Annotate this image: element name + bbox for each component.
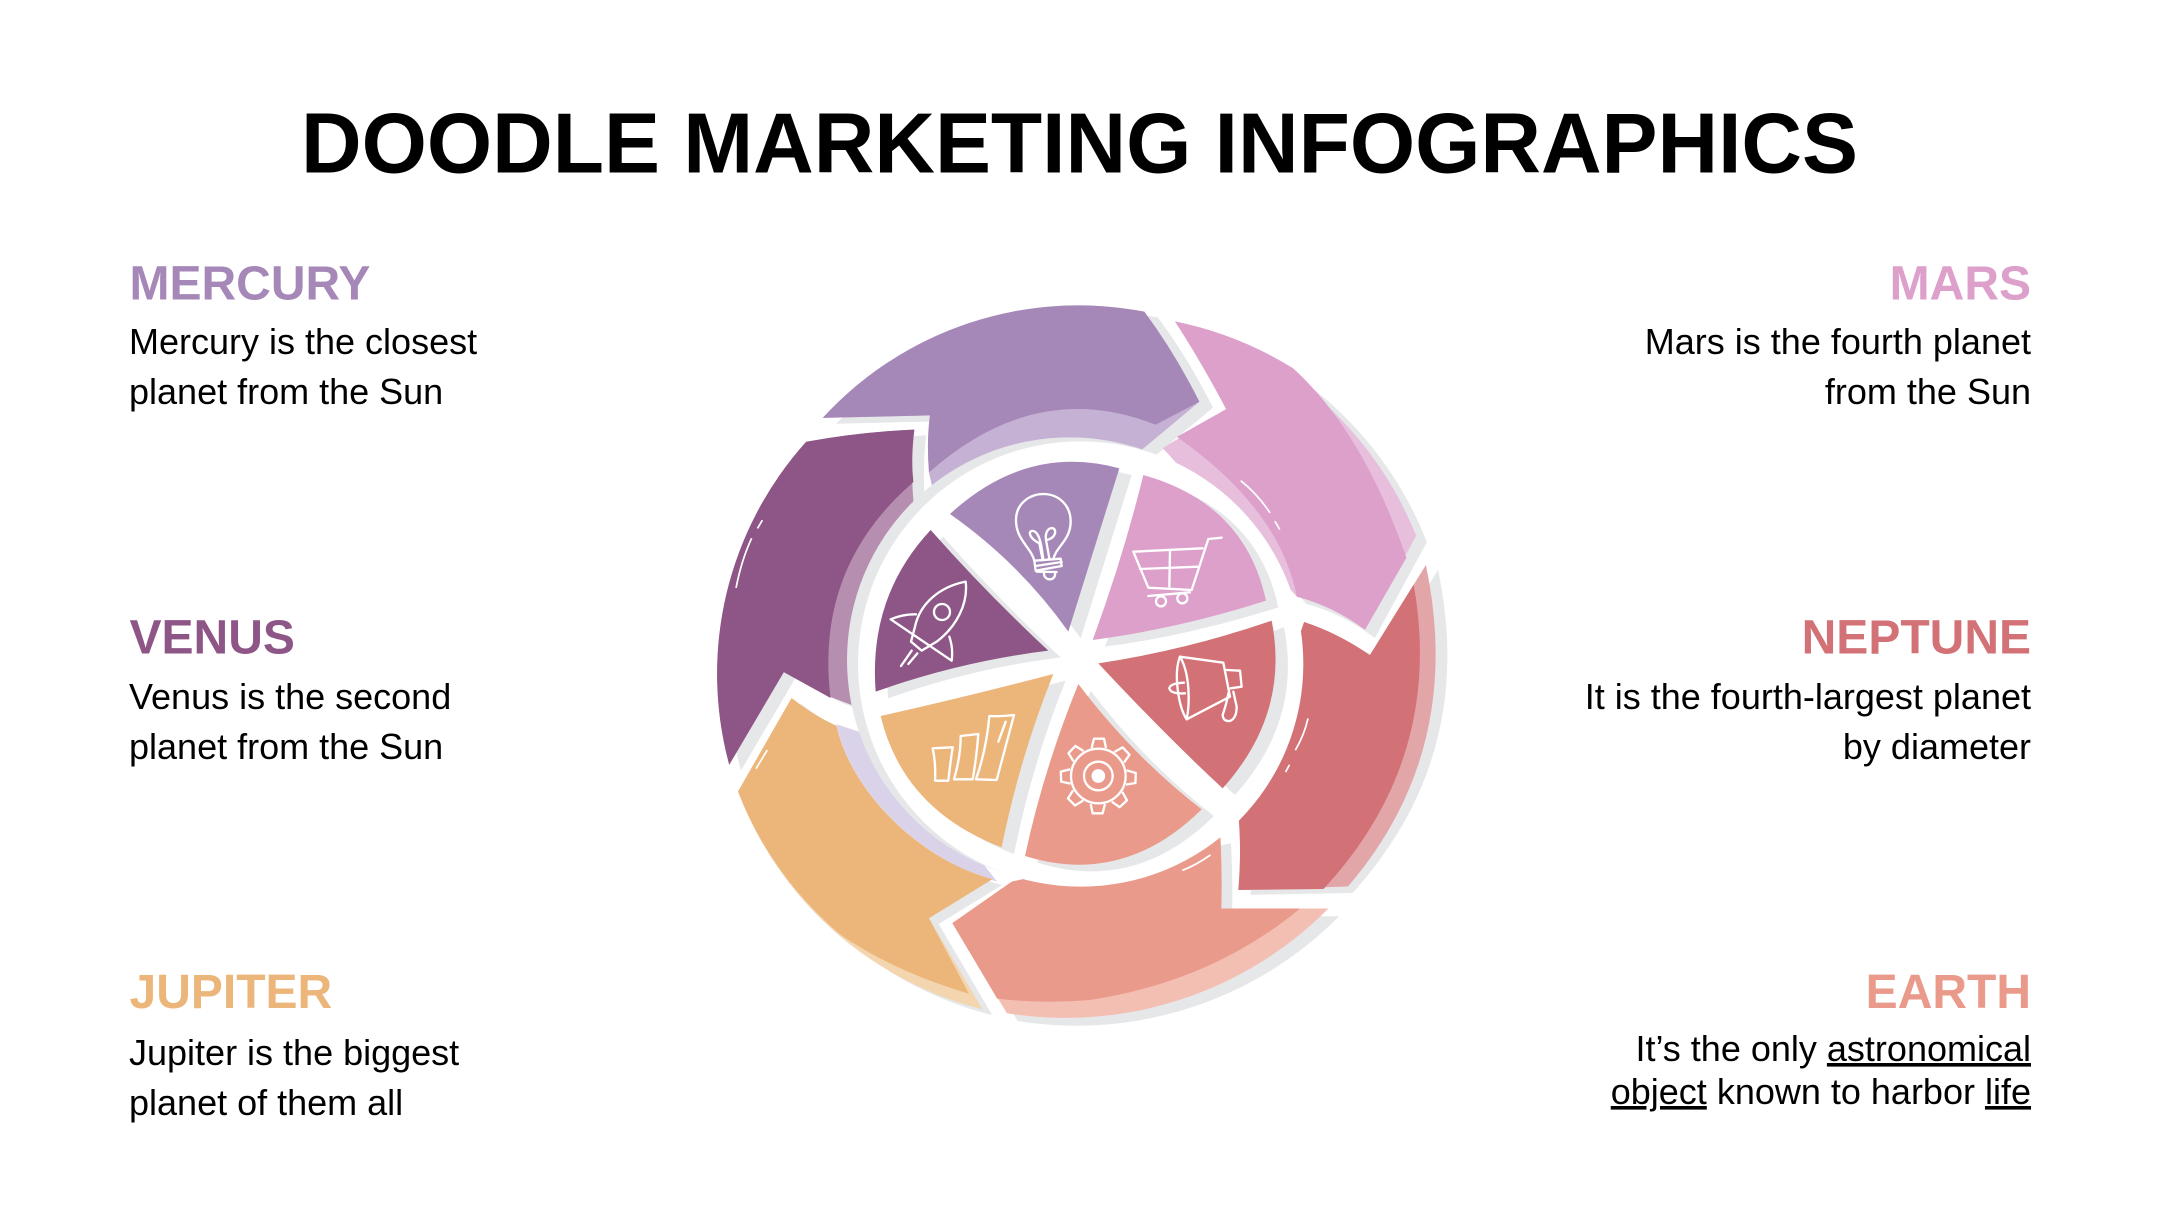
text block: Mercury: planet from the Sun bbox=[129, 371, 443, 412]
text block: Earth: It’s the only astronomical bbox=[1635, 1028, 2031, 1069]
text block: Neptune bbox=[1585, 612, 2031, 767]
arrow: Jupiter bbox=[738, 698, 997, 1009]
text block: Mars: MARS bbox=[1890, 258, 2031, 310]
text block: Jupiter: JUPITER bbox=[130, 966, 332, 1019]
wedge: Earth bbox=[1025, 684, 1202, 865]
text block: Jupiter bbox=[129, 966, 459, 1123]
text block: Earth bbox=[1611, 966, 2031, 1112]
arrow: Earth bbox=[952, 835, 1328, 1018]
circular diagram bbox=[717, 305, 1447, 1026]
arrow: Venus bbox=[717, 430, 915, 765]
text block: Mars: Mars is the fourth planet bbox=[1645, 321, 2031, 362]
wedge: Neptune bbox=[1098, 621, 1276, 788]
text block: Venus bbox=[129, 612, 451, 767]
text block: Earth: object known to harbor life bbox=[1611, 1071, 2031, 1112]
wedge: Venus bbox=[875, 530, 1048, 692]
text block: Mercury: MERCURY bbox=[130, 258, 370, 310]
text block: Earth: EARTH bbox=[1866, 966, 2031, 1019]
text block: Jupiter: planet of them all bbox=[129, 1082, 403, 1123]
arrow: Mercury bbox=[823, 305, 1199, 494]
arrow: Neptune bbox=[1238, 565, 1436, 890]
title: DOODLE MARKETING INFOGRAPHICS bbox=[301, 96, 1858, 192]
outer ring of arrows bbox=[717, 305, 1447, 1026]
text block: Venus: planet from the Sun bbox=[129, 726, 443, 767]
icon: bar chart bbox=[933, 715, 1014, 781]
text block: Neptune: It is the fourth-largest planet bbox=[1585, 676, 2031, 717]
arrow: Mars bbox=[1163, 321, 1416, 630]
icon: megaphone bbox=[1169, 657, 1242, 721]
wedge: Mercury bbox=[950, 462, 1119, 632]
icon: rocket bbox=[891, 582, 966, 666]
text block: Mars bbox=[1645, 258, 2031, 412]
wedge: Mars bbox=[1093, 475, 1266, 640]
text block: Neptune: by diameter bbox=[1843, 726, 2031, 767]
text block: Neptune: NEPTUNE bbox=[1802, 612, 2031, 664]
icon: light bulb bbox=[1016, 494, 1071, 579]
inner pie of wedges with icons bbox=[847, 437, 1303, 887]
wedge: Jupiter bbox=[881, 674, 1053, 847]
text block: Mercury: Mercury is the closest bbox=[129, 321, 477, 362]
text block: Mars: from the Sun bbox=[1825, 371, 2031, 412]
text block: Venus: Venus is the second bbox=[129, 676, 451, 717]
icon: shopping cart bbox=[1133, 538, 1222, 606]
text block: Venus: VENUS bbox=[130, 612, 295, 664]
text block: Mercury bbox=[129, 258, 477, 412]
icon: gear bbox=[1061, 739, 1136, 813]
text block: Jupiter: Jupiter is the biggest bbox=[129, 1032, 459, 1073]
